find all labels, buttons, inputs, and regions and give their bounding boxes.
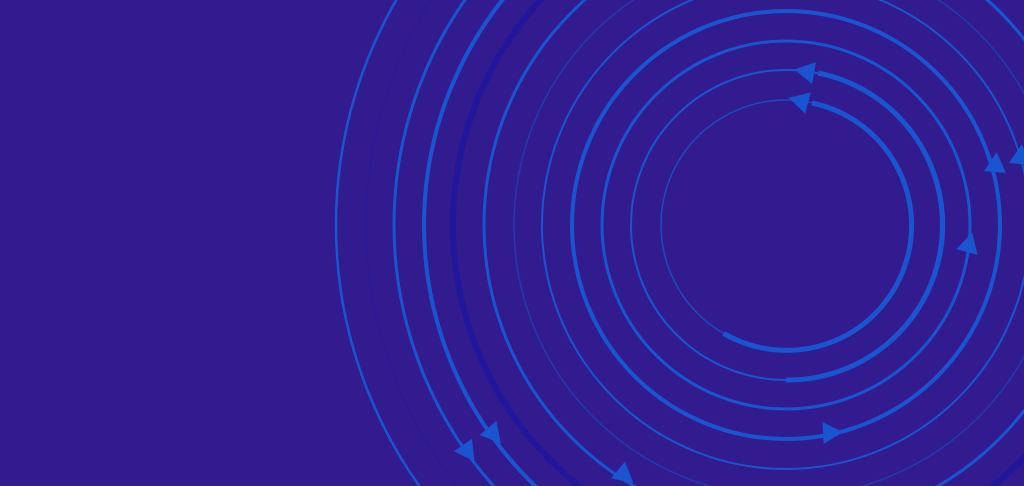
arrow: top inner <box>786 87 811 114</box>
concentric rings <box>336 0 1024 486</box>
arrow: top outer <box>792 59 816 84</box>
arrow: right up 2 <box>984 151 1008 173</box>
arrow: right up 3 <box>1009 143 1024 165</box>
arrow: bottom left 1 <box>480 421 509 450</box>
arrow: bottom left 2 <box>454 439 483 468</box>
arrow: bottom middle <box>611 462 640 486</box>
arrowheads <box>454 59 1024 486</box>
arrow: bottom right <box>822 421 844 444</box>
arrow: right up 1 <box>956 230 983 255</box>
